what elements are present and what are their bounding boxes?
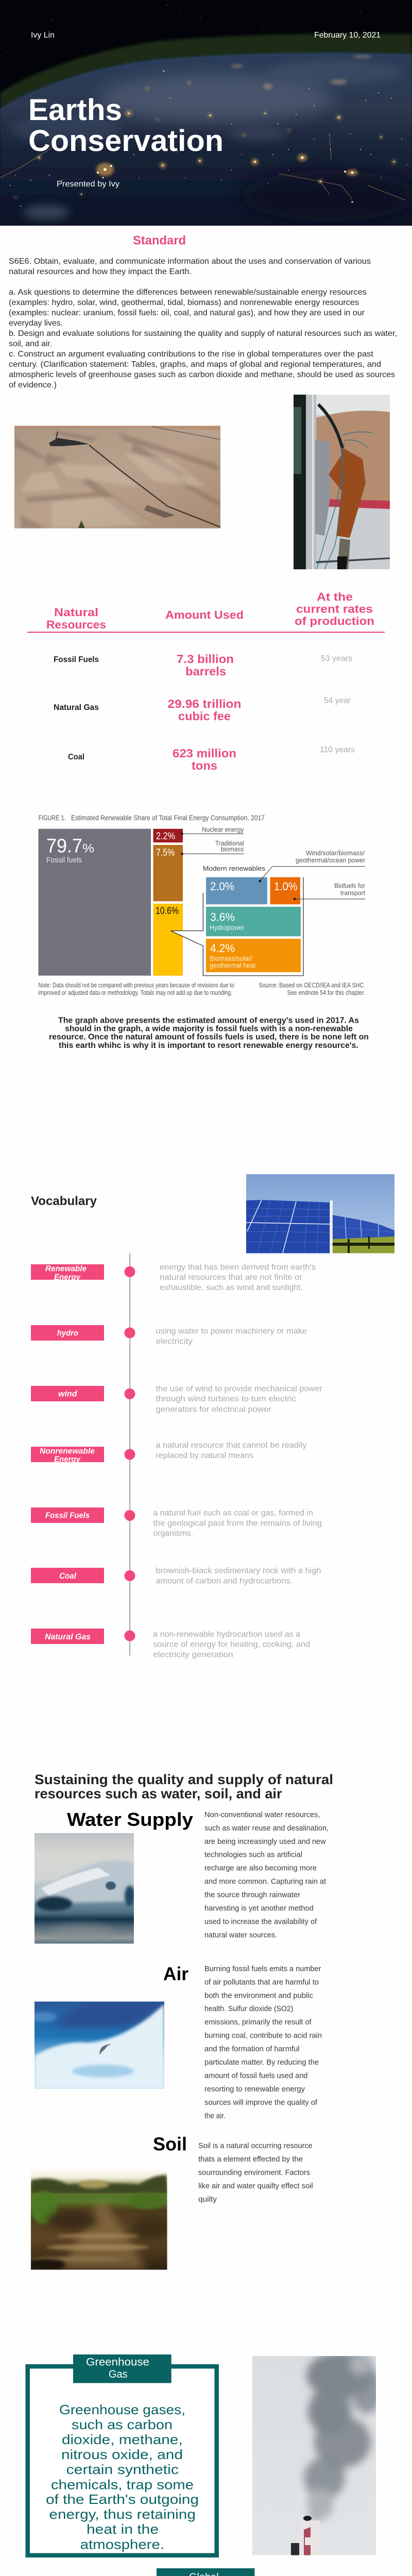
author name: Ivy Lin — [31, 31, 55, 40]
term: fossil fuels: organisms. — [153, 1529, 193, 1538]
title — [28, 93, 224, 158]
block: biomass solar geothermal heat: geothermal heat — [210, 961, 255, 970]
block: fossil fuels — [38, 829, 151, 976]
chart note — [38, 982, 234, 996]
image: open pit coal mine — [14, 426, 220, 529]
text block: water supply: such as water reuse and desalination, — [204, 1824, 329, 1833]
row: coal: 110 years — [320, 745, 355, 754]
heading: sustaining natural resources: Sustaining the quality and supply of natural — [35, 1772, 333, 1787]
row: natural gas — [54, 697, 351, 723]
row: coal: 623 million — [173, 747, 236, 760]
term: nonrenewable energy: a natural resource that cannot be readily — [156, 1441, 307, 1450]
text block: soil: quilty — [198, 2196, 217, 2204]
term: fossil fuels: Fossil Fuels — [45, 1511, 90, 1520]
term: renewable energy: energy that has been derived from earth's — [160, 1263, 316, 1272]
row: fossil fuels: 7.3 billion — [177, 652, 234, 666]
block: modern renewables total: 10.6% — [156, 906, 179, 917]
text block: soil: thats a element effected by the — [198, 2155, 303, 2163]
image: sky with bird — [31, 2002, 164, 2089]
panel: vocabulary timeline — [31, 1253, 323, 1659]
text block: standard description: S6E6. Obtain, evaluate, and communicate information about the uses and conservation of various — [9, 257, 371, 266]
text block: graph explanation: should in the graph, a wide majority is fossil fuels with is a non-renewable — [65, 1025, 353, 1033]
text block: air: emissions, primarily the result of — [204, 2019, 312, 2027]
table header: natural resources: Resources — [46, 618, 106, 631]
panel text: greenhouse gas definition: of the Earth's outgoing — [46, 2492, 199, 2507]
row: fossil fuels: 53 years — [321, 654, 352, 663]
text block: standard description: of evidence.) — [9, 381, 57, 389]
text block: standard description: b. Design and evaluate solutions for sustaining the quality and supply of natural resources such as water, — [9, 329, 397, 338]
panel: hero cover — [0, 0, 412, 226]
term: wind: generators for electrical power. — [156, 1405, 273, 1414]
chart source: Source: Based on OECD/IEA and IEA SHC. — [259, 982, 365, 989]
date: February 10, 2021 — [314, 31, 381, 40]
block: traditional biomass — [153, 839, 244, 901]
chart: renewable share of energy consumption — [38, 814, 366, 996]
text block: standard description: natural resources and how they impact the Earth. — [9, 267, 192, 276]
block: modern renewables total — [153, 904, 183, 976]
block: biofuels for transport: Biofuels for — [334, 882, 366, 889]
block: nuclear energy: Nuclear energy — [202, 825, 244, 834]
block: wind solar biomass power: geothermal/ocean power — [296, 856, 366, 864]
image: smokestack — [252, 2352, 382, 2555]
image: water splash — [35, 1833, 135, 1944]
text block: graph explanation — [49, 1016, 369, 1050]
heading: sustaining natural resources: resources such as water, soil, and air — [35, 1786, 282, 1802]
panel text: greenhouse gas definition: chemicals, trap some — [51, 2477, 194, 2492]
panel text: greenhouse gas definition: certain synthetic — [66, 2462, 179, 2477]
term: renewable energy: Renewable — [45, 1265, 87, 1274]
row: fossil fuels — [54, 652, 352, 678]
block: biomass solar geothermal heat: Biomass/solar/ — [210, 955, 252, 962]
text block: air: amount of fossil fuels used and — [204, 2072, 307, 2080]
image: fuel pump nozzle — [294, 395, 390, 569]
panel header: global temperature — [157, 2568, 254, 2576]
text block: water supply: are being increasingly used and new — [204, 1838, 326, 1846]
row: fossil fuels: barrels — [185, 665, 226, 678]
text block: air — [204, 1965, 322, 2121]
text block: standard description: (examples: hydro, solar, wind, geothermal, tidal, biomass) and nonrenewable energy resources — [9, 298, 359, 307]
term: wind: wind — [58, 1390, 78, 1399]
panel header: greenhouse gas: Gas — [109, 2368, 128, 2380]
callout bracket: modern renewables: Modern renewables — [203, 865, 266, 872]
text block: air: particulate matter. By reducing the — [204, 2059, 319, 2067]
row: coal — [68, 745, 355, 772]
panel header: greenhouse gas: Greenhouse — [86, 2357, 149, 2368]
block: biofuels for transport — [270, 877, 366, 904]
heading: vocabulary: Vocabulary — [31, 1194, 97, 1208]
text block: soil: Soil is a natural occurring resource — [198, 2142, 313, 2150]
chart source: See endnote 54 for this chapter. — [287, 989, 365, 996]
block: fossil fuels: 79.7 — [46, 836, 82, 857]
text block: water supply: harvesting is yet another method — [204, 1905, 314, 1913]
term: fossil fuels: the geological past from the remains of living — [153, 1519, 322, 1528]
block: traditional biomass: Traditional — [215, 839, 244, 847]
text block: standard description: (examples: nuclear: uranium, fossil fuels: oil, coal, and natural gas), and how they are used in our — [9, 309, 365, 317]
table header: at the current rates of production: of production — [295, 615, 374, 628]
text block: air: resorting to renewable energy — [204, 2086, 305, 2094]
term: nonrenewable energy: replaced by natural means — [156, 1451, 253, 1460]
text block: water supply: Non-conventional water resources, — [204, 1811, 320, 1819]
term: wind: the use of wind to provide mechanical power — [156, 1384, 323, 1393]
subtitle: Presented by Ivy — [57, 180, 119, 189]
table header: at the current rates of production: current rates — [296, 603, 373, 615]
table header: amount used: Amount Used — [165, 608, 244, 621]
term: renewable energy: natural resources that are not finite or — [160, 1273, 303, 1282]
block: wind solar biomass power: Wind/solar/biomass/ — [306, 849, 365, 857]
term: nonrenewable energy — [31, 1442, 307, 1462]
text block: graph explanation: resource. Once the natural amount of fossils fuels is used, there is be none left on — [49, 1033, 369, 1042]
term: natural gas: electricity generation — [153, 1651, 233, 1659]
panel text: greenhouse gas definition: such as carbon — [72, 2417, 173, 2432]
term: coal — [31, 1567, 321, 1586]
text block: standard description: a. Ask questions to determine the differences between renewable/sustainable energy resources — [9, 288, 367, 297]
term: natural gas: source of energy for heating, cooking, and — [153, 1640, 310, 1649]
term: renewable energy: exhaustible, such as wind and sunlight. — [160, 1283, 303, 1292]
title: Conservation — [28, 124, 224, 158]
block: biomass solar geothermal heat: 4.2% — [210, 942, 235, 955]
panel text: greenhouse gas definition: energy, thus retaining — [49, 2506, 196, 2522]
block: nuclear energy: 2.2% — [156, 831, 175, 842]
panel text: greenhouse gas definition: atmosphere. — [80, 2536, 164, 2552]
term: coal: Coal — [59, 1572, 77, 1581]
row: natural gas: Natural Gas — [54, 703, 99, 712]
block: traditional biomass: 7.5% — [156, 848, 175, 858]
text block: standard description: everyday lives. — [9, 319, 63, 328]
heading: standard: Standard — [133, 234, 186, 247]
block: biomass solar geothermal heat — [206, 939, 301, 972]
term: natural gas: Natural Gas — [45, 1633, 91, 1641]
text block: soil: like air and water quailty effect soil — [198, 2182, 313, 2190]
block: wind solar biomass power — [206, 849, 366, 904]
term: hydro: using water to power machinery or make — [156, 1327, 307, 1336]
chart source — [259, 982, 365, 996]
chart title: Estimated Renewable Share of Total Final Energy Consumption, 2017 — [71, 814, 265, 822]
term: wind: through wind turbines to turn electric — [156, 1395, 296, 1403]
text block: water supply: and more common. Capturing rain at — [204, 1878, 326, 1886]
text block: standard description: atmospheric levels of greenhouse gases such as carbon dioxide and methane, should be used as sources — [9, 370, 395, 379]
text block: air: both the environment and public — [204, 1992, 313, 2000]
text block: water supply: recharge are also becoming more — [204, 1865, 317, 1873]
panel text: greenhouse gas definition: Greenhouse gases, — [59, 2402, 185, 2417]
image: soil field — [28, 2167, 173, 2270]
text block: air: sources will improve the quality of — [204, 2099, 318, 2107]
term: wind — [31, 1384, 323, 1414]
chart note: improved or adjusted data or methodology. Totals may not add up due to rounding. — [38, 989, 232, 996]
heading: water supply: Water Supply — [67, 1809, 193, 1830]
image: earth at night from space — [0, 0, 412, 226]
row: coal: Coal — [68, 753, 84, 761]
term: hydro — [31, 1325, 307, 1346]
text block: graph explanation: The graph above presents the estimated amount of energy's used in 2017. As — [58, 1016, 359, 1025]
panel header: greenhouse gas — [73, 2354, 171, 2383]
panel text: greenhouse gas definition: nitrous oxide, and — [61, 2447, 183, 2462]
block: traditional biomass: biomass — [221, 845, 244, 853]
block: biofuels for transport: 1.0% — [274, 880, 298, 893]
text block: water supply: technologies such as artificial — [204, 1851, 302, 1859]
text block: air: burning coal, contribute to acid rain — [204, 2032, 322, 2040]
block: nuclear energy — [153, 825, 244, 842]
text block: standard description — [9, 257, 397, 389]
heading: sustaining natural resources — [35, 1772, 333, 1802]
text block: water supply: natural water sources. — [204, 1931, 277, 1940]
text block: air: the air. — [204, 2112, 226, 2121]
panel text: greenhouse gas definition: heat in the — [87, 2521, 159, 2537]
term: nonrenewable energy: Nonrenewable — [40, 1447, 95, 1456]
text block: graph explanation: this earth whihc is why it is important to resort renewable energy resource's. — [59, 1041, 358, 1050]
term: fossil fuels: a natural fuel such as coal or gas, formed in — [153, 1509, 313, 1518]
row: natural gas: cubic fee — [178, 709, 231, 723]
text block: water supply — [204, 1811, 329, 1940]
block: wind solar biomass power: 2.0% — [210, 880, 234, 893]
term: hydro: electricity — [156, 1337, 193, 1346]
text block: water supply: used to increase the availability of — [204, 1918, 317, 1926]
table: natural resources — [27, 590, 385, 772]
text block: air: Burning fossil fuels emits a number — [204, 1965, 321, 1973]
text block: standard description: century. (Clarification statement: Tables, graphs, and maps of global and regional temperatures, and — [9, 360, 381, 369]
text block: soil: sourrounding enviroment. Factors — [198, 2168, 310, 2177]
callout bracket: modern renewables — [171, 865, 303, 976]
text block: air: of air pollutants that are harmful to — [204, 1978, 319, 1987]
panel: greenhouse gas — [28, 2354, 217, 2555]
term: hydro: hydro — [57, 1329, 78, 1337]
text block: standard description: soil, and air. — [9, 340, 52, 348]
heading: air: Air — [163, 1963, 188, 1984]
term: nonrenewable energy: Energy — [54, 1455, 81, 1464]
chart title: FIGURE 1. — [38, 814, 66, 822]
term: coal: amount of carbon and hydrocarbons. — [156, 1577, 293, 1586]
row: fossil fuels: Fossil Fuels — [54, 655, 99, 664]
text block: air: health. Sulfur dioxide (SO2) — [204, 2005, 293, 2013]
term: renewable energy: Energy — [54, 1273, 81, 1282]
block: fossil fuels: Fossil fuels — [46, 856, 82, 865]
block: hydropower — [206, 907, 301, 936]
heading: soil: Soil — [153, 2133, 187, 2155]
term: renewable energy — [31, 1263, 316, 1292]
block: fossil fuels: % — [82, 842, 94, 855]
block: biofuels for transport: transport — [340, 889, 365, 897]
table header: natural resources — [46, 606, 106, 631]
row: natural gas: 54 year — [324, 697, 351, 705]
row: coal: tons — [192, 759, 217, 772]
panel text: greenhouse gas definition — [46, 2402, 199, 2552]
text block: soil — [198, 2142, 313, 2204]
table header: at the current rates of production — [295, 590, 374, 628]
chart note: Note: Data should not be compared with previous years because of revisions due to — [38, 982, 234, 989]
text block: air: and the formation of harmful — [204, 2045, 300, 2054]
term: natural gas — [31, 1629, 310, 1659]
block: hydropower: 3.6% — [210, 911, 235, 924]
row: natural gas: 29.96 trillion — [168, 697, 241, 710]
text block: standard description: c. Construct an argument evaluating contributions to the rise in global temperatures over the past — [9, 350, 374, 359]
panel text: greenhouse gas definition: dioxide, methane, — [62, 2432, 183, 2447]
text block: water supply: the source through rainwater — [204, 1891, 300, 1900]
table header: at the current rates of production: At the — [317, 590, 353, 603]
panel: global temperature — [111, 2568, 300, 2576]
table header: natural resources: Natural — [54, 606, 98, 619]
title: Earths — [28, 93, 122, 127]
term: coal: brownish-black sedimentary rock with a high — [156, 1567, 321, 1575]
term: natural gas: a non-renewable hydrocarbon used as a — [153, 1630, 300, 1639]
block: hydropower: Hydropower — [210, 924, 245, 931]
image: solar panels — [246, 1174, 394, 1253]
term: fossil fuels — [31, 1507, 322, 1538]
